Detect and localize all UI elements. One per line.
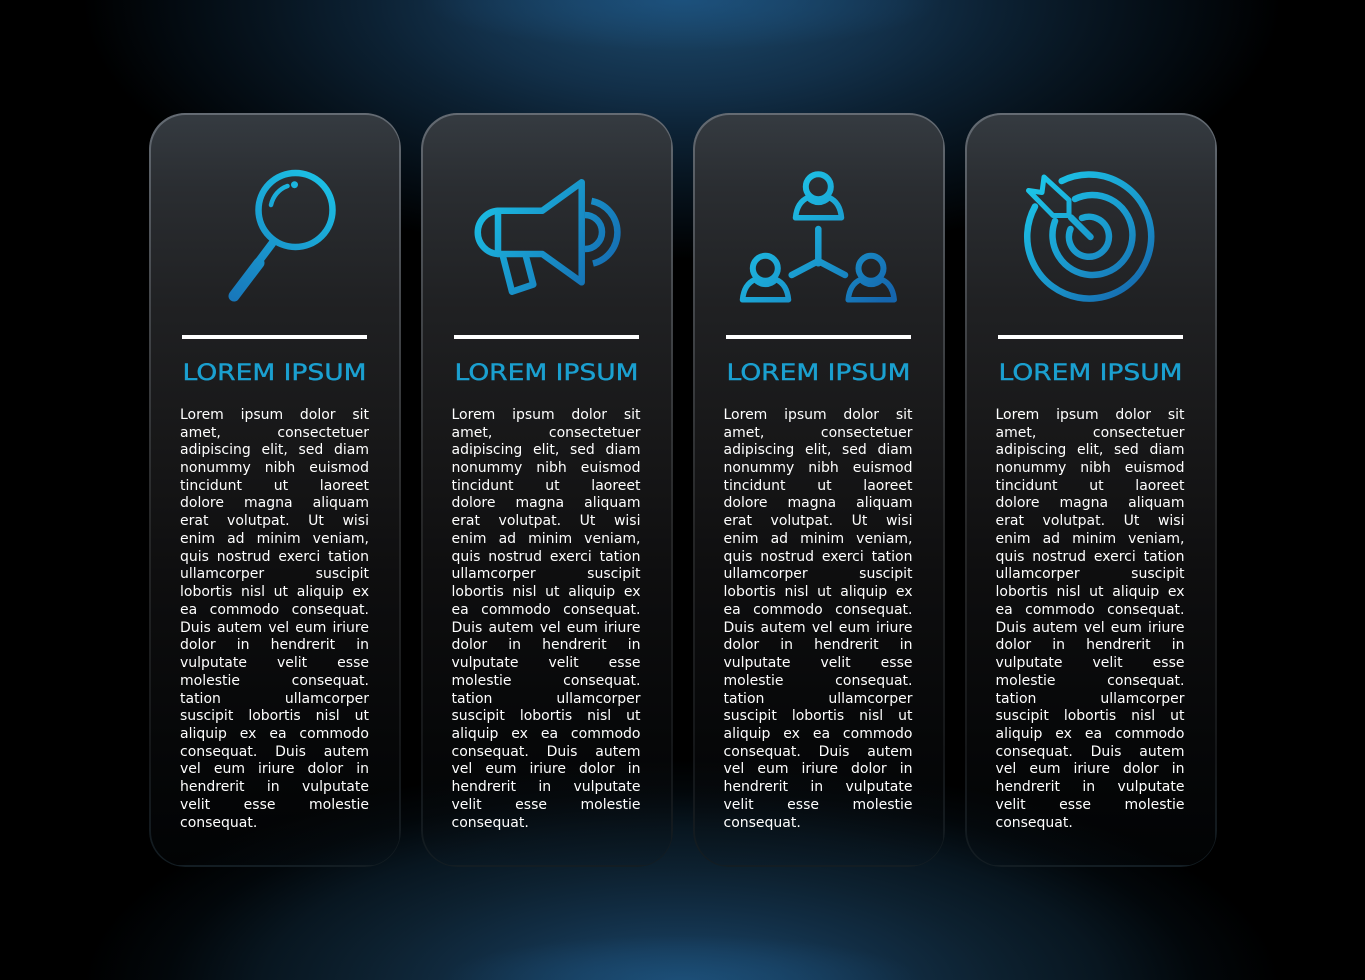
text block: enim ad minim veniam,: [180, 531, 369, 547]
heading: LOREM IPSUM: [454, 361, 638, 386]
text block: ullamcorper suscipit: [180, 566, 369, 582]
icon: magnifying glass: [228, 170, 336, 302]
text block: consequat.: [996, 815, 1073, 831]
text block: ea commodo consequat.: [724, 602, 912, 618]
text block: vulputate velit esse: [724, 655, 912, 671]
text block: tincidunt ut laoreet: [724, 478, 912, 494]
text block: dolore magna aliquam: [180, 495, 369, 511]
text block: dolor in hendrerit in: [996, 637, 1184, 653]
icon: connected people: [740, 171, 897, 302]
text block: hendrerit in vulputate: [452, 779, 640, 795]
text block: hendrerit in vulputate: [180, 779, 369, 795]
text block: adipiscing elit, sed diam: [452, 442, 640, 458]
text block: erat volutpat. Ut wisi: [996, 513, 1184, 529]
text block: Duis autem vel eum iriure: [724, 620, 912, 636]
text block: consequat. Duis autem: [996, 744, 1184, 760]
text block: tincidunt ut laoreet: [452, 478, 640, 494]
text block: hendrerit in vulputate: [996, 779, 1184, 795]
text block: adipiscing elit, sed diam: [180, 442, 369, 458]
text block: [724, 407, 912, 831]
text block: vel eum iriure dolor in: [452, 761, 640, 777]
text block: [452, 407, 640, 831]
text block: ea commodo consequat.: [180, 602, 369, 618]
text block: nonummy nibh euismod: [996, 460, 1184, 476]
panel: target: [964, 112, 1216, 866]
text block: tation ullamcorper: [452, 691, 640, 707]
text block: Lorem ipsum dolor sit: [724, 407, 912, 423]
text block: enim ad minim veniam,: [724, 531, 912, 547]
text block: erat volutpat. Ut wisi: [180, 513, 369, 529]
text block: dolore magna aliquam: [724, 495, 912, 511]
text block: velit esse molestie: [996, 797, 1184, 813]
text block: ea commodo consequat.: [452, 602, 640, 618]
text block: amet, consectetuer: [180, 425, 369, 441]
text block: vulputate velit esse: [452, 655, 640, 671]
text block: adipiscing elit, sed diam: [724, 442, 912, 458]
text block: ea commodo consequat.: [996, 602, 1184, 618]
panel: search: [148, 112, 400, 866]
text block: lobortis nisl ut aliquip ex: [724, 584, 912, 600]
text block: velit esse molestie: [180, 797, 369, 813]
text block: aliquip ex ea commodo: [452, 726, 640, 742]
text block: vel eum iriure dolor in: [724, 761, 912, 777]
text block: quis nostrud exerci tation: [996, 549, 1184, 565]
text block: nonummy nibh euismod: [452, 460, 640, 476]
text block: tation ullamcorper: [180, 691, 369, 707]
heading: LOREM IPSUM: [998, 361, 1182, 386]
text block: suscipit lobortis nisl ut: [996, 708, 1184, 724]
text block: nonummy nibh euismod: [724, 460, 912, 476]
text block: Duis autem vel eum iriure: [996, 620, 1184, 636]
text block: amet, consectetuer: [452, 425, 640, 441]
text block: ullamcorper suscipit: [996, 566, 1184, 582]
text block: adipiscing elit, sed diam: [996, 442, 1184, 458]
text block: vulputate velit esse: [180, 655, 369, 671]
text block: Duis autem vel eum iriure: [452, 620, 640, 636]
divider line: [182, 335, 367, 338]
text block: lobortis nisl ut aliquip ex: [180, 584, 369, 600]
text block: suscipit lobortis nisl ut: [180, 708, 369, 724]
text block: enim ad minim veniam,: [452, 531, 640, 547]
text block: aliquip ex ea commodo: [724, 726, 912, 742]
icon: target with arrow: [1024, 171, 1154, 302]
text block: tation ullamcorper: [724, 691, 912, 707]
text block: molestie consequat.: [180, 673, 369, 689]
text block: dolor in hendrerit in: [724, 637, 912, 653]
text block: [180, 407, 369, 831]
text block: consequat. Duis autem: [180, 744, 369, 760]
icon: megaphone: [474, 179, 621, 295]
divider line: [998, 335, 1183, 338]
heading: LOREM IPSUM: [182, 361, 366, 386]
text block: erat volutpat. Ut wisi: [452, 513, 640, 529]
text block: aliquip ex ea commodo: [180, 726, 369, 742]
text block: dolor in hendrerit in: [180, 637, 369, 653]
text block: Lorem ipsum dolor sit: [452, 407, 640, 423]
text block: quis nostrud exerci tation: [452, 549, 640, 565]
panel: team: [692, 112, 944, 866]
text block: consequat.: [180, 815, 257, 831]
text block: molestie consequat.: [996, 673, 1184, 689]
text block: vulputate velit esse: [996, 655, 1184, 671]
text block: Duis autem vel eum iriure: [180, 620, 369, 636]
text block: hendrerit in vulputate: [724, 779, 912, 795]
text block: tincidunt ut laoreet: [996, 478, 1184, 494]
text block: [996, 407, 1184, 831]
text block: enim ad minim veniam,: [996, 531, 1184, 547]
text block: Lorem ipsum dolor sit: [996, 407, 1184, 423]
divider line: [726, 335, 911, 338]
text block: consequat.: [724, 815, 801, 831]
text block: lobortis nisl ut aliquip ex: [996, 584, 1184, 600]
heading: LOREM IPSUM: [726, 361, 910, 386]
text block: nonummy nibh euismod: [180, 460, 369, 476]
text block: tation ullamcorper: [996, 691, 1184, 707]
text block: dolore magna aliquam: [996, 495, 1184, 511]
text block: molestie consequat.: [724, 673, 912, 689]
text block: velit esse molestie: [724, 797, 912, 813]
text block: tincidunt ut laoreet: [180, 478, 369, 494]
text block: consequat. Duis autem: [452, 744, 640, 760]
text block: lobortis nisl ut aliquip ex: [452, 584, 640, 600]
text block: amet, consectetuer: [724, 425, 912, 441]
text block: erat volutpat. Ut wisi: [724, 513, 912, 529]
text block: molestie consequat.: [452, 673, 640, 689]
text block: ullamcorper suscipit: [724, 566, 912, 582]
text block: ullamcorper suscipit: [452, 566, 640, 582]
text block: vel eum iriure dolor in: [180, 761, 369, 777]
text block: vel eum iriure dolor in: [996, 761, 1184, 777]
divider line: [454, 335, 639, 338]
text block: suscipit lobortis nisl ut: [724, 708, 912, 724]
text block: velit esse molestie: [452, 797, 640, 813]
text block: amet, consectetuer: [996, 425, 1184, 441]
text block: consequat.: [452, 815, 529, 831]
text block: consequat. Duis autem: [724, 744, 912, 760]
text block: quis nostrud exerci tation: [724, 549, 912, 565]
text block: Lorem ipsum dolor sit: [180, 407, 369, 423]
text block: suscipit lobortis nisl ut: [452, 708, 640, 724]
text block: aliquip ex ea commodo: [996, 726, 1184, 742]
text block: dolore magna aliquam: [452, 495, 640, 511]
text block: dolor in hendrerit in: [452, 637, 640, 653]
text block: quis nostrud exerci tation: [180, 549, 369, 565]
panel: announce: [420, 112, 672, 866]
